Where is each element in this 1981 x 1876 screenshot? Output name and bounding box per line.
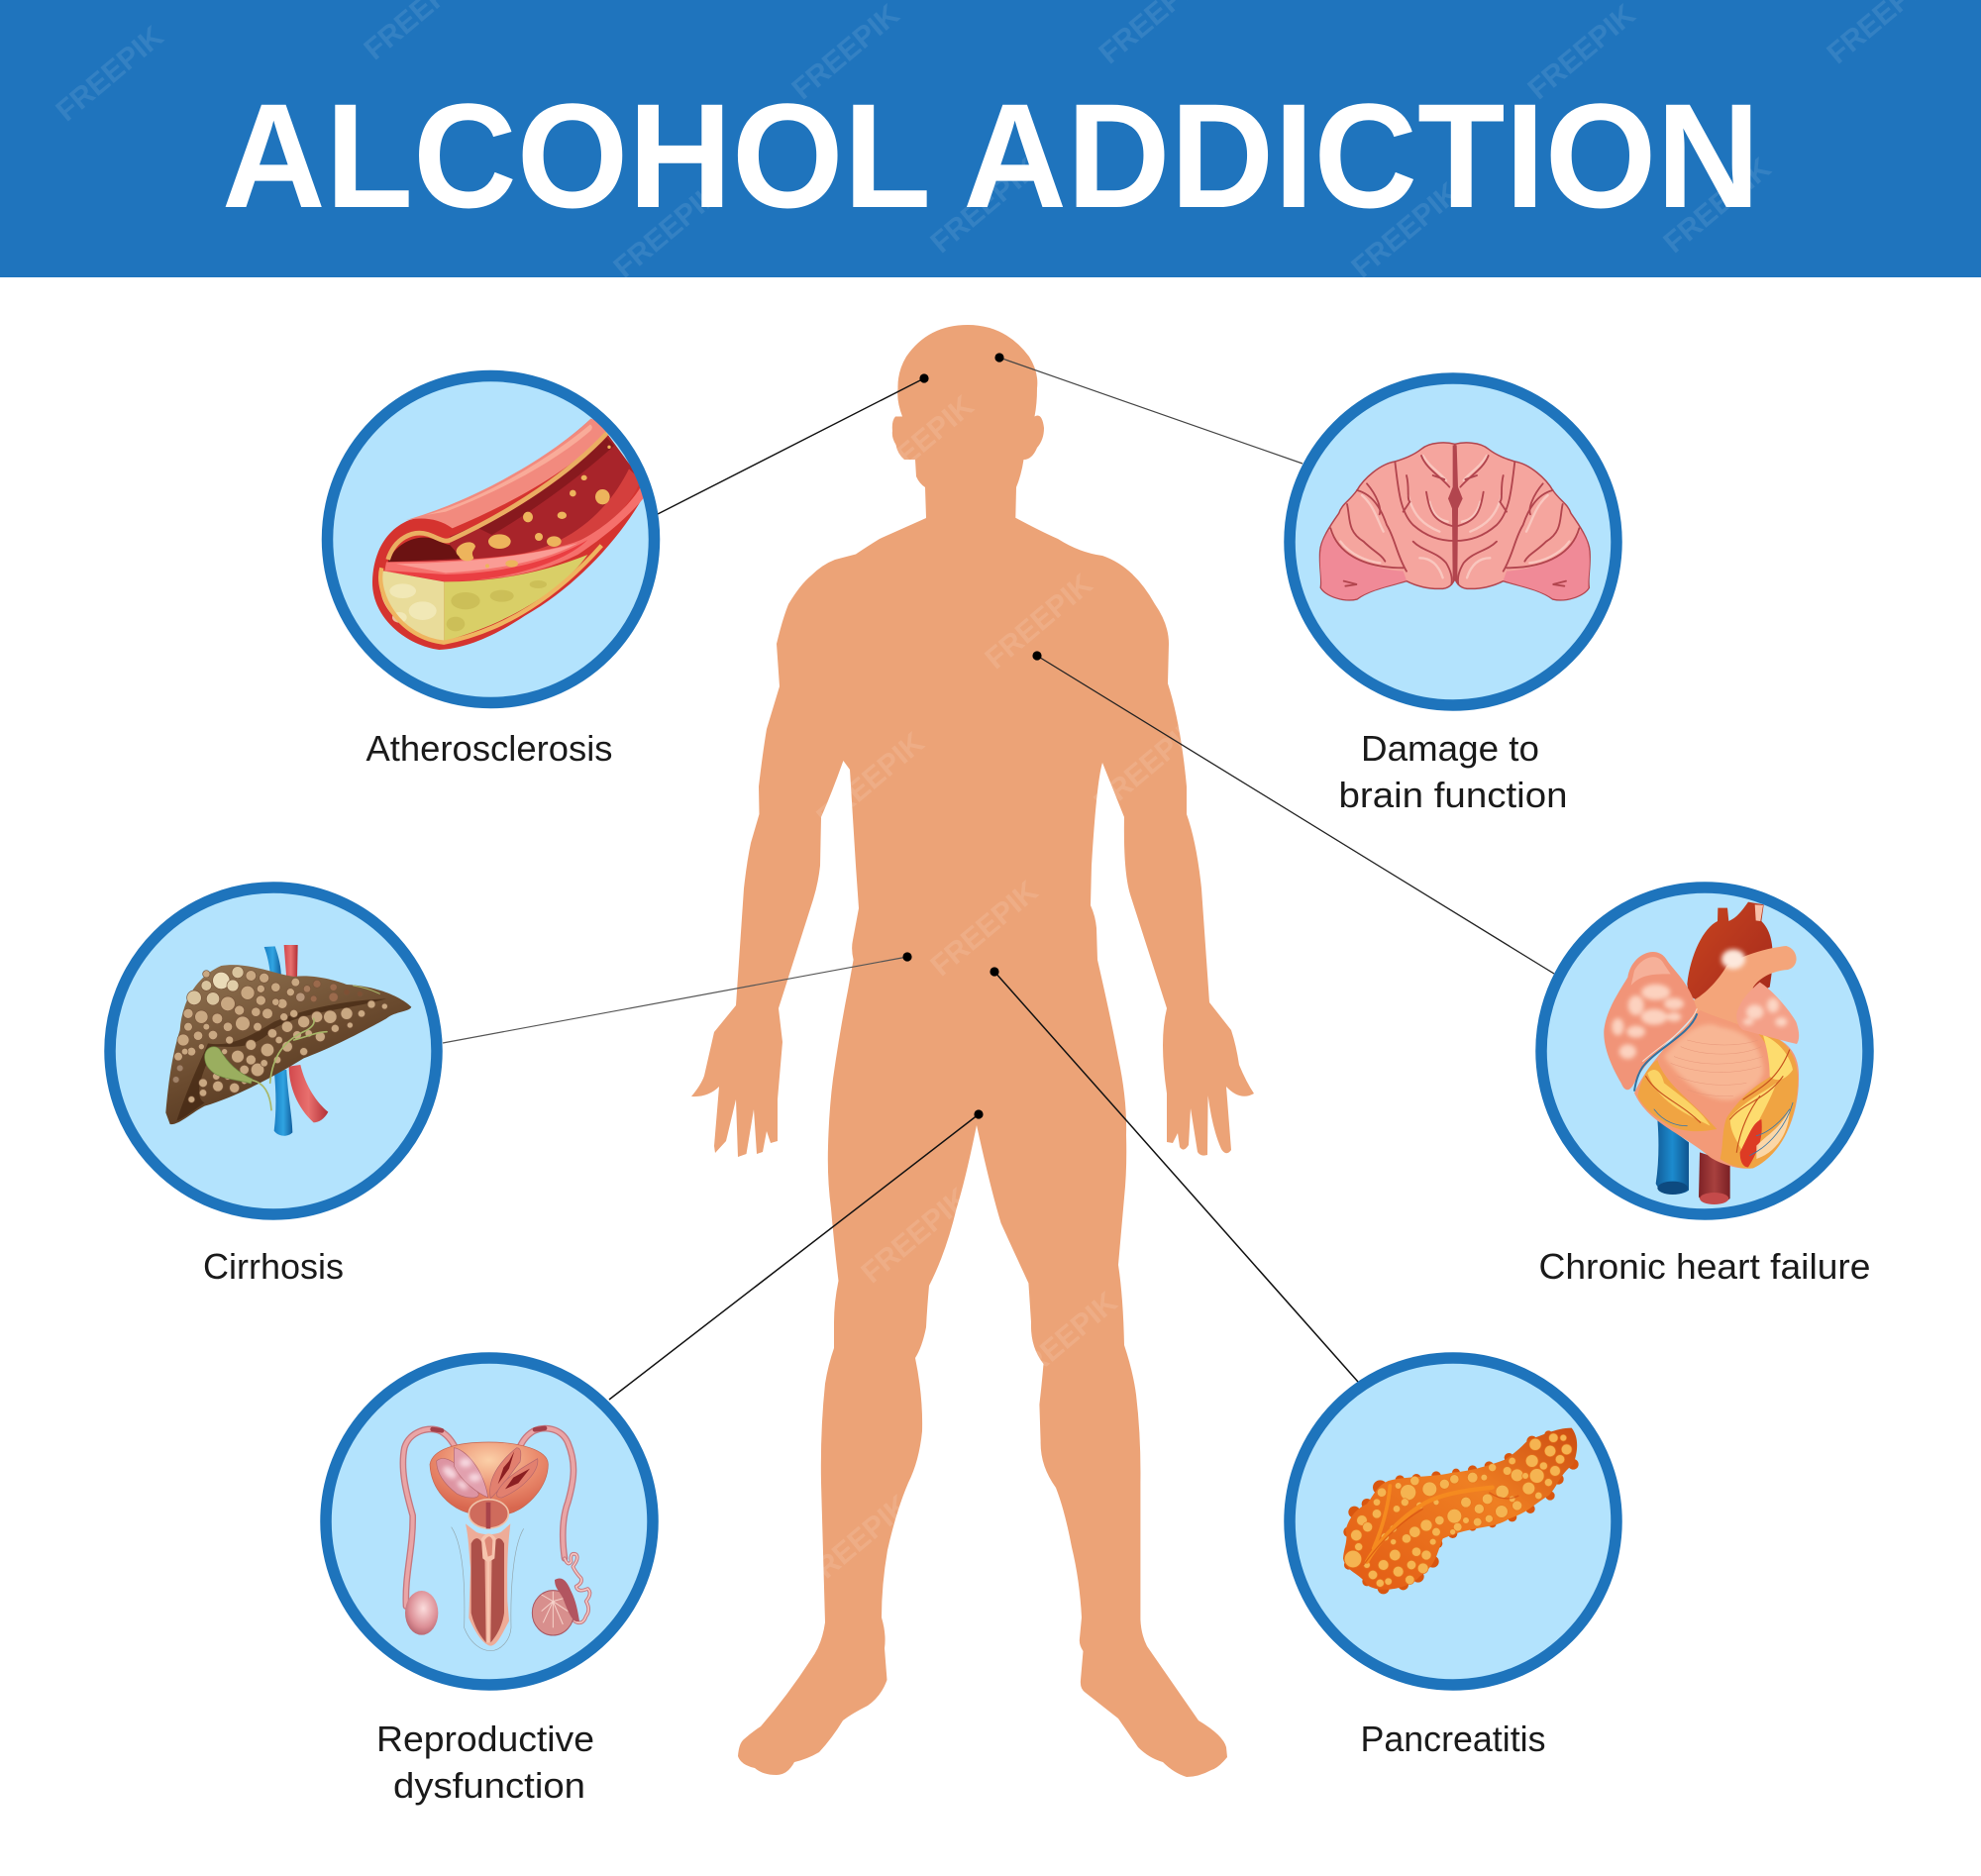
panel: chronic heart failure: [1541, 887, 1868, 1214]
coronary fat: [1720, 1033, 1798, 1169]
testicle left: [405, 1591, 438, 1635]
icon: artery with plaque: [372, 419, 647, 650]
label: cirrhosis: Cirrhosis: [203, 1246, 344, 1287]
body watermarks: [795, 389, 1208, 1597]
icon: brain: [1319, 357, 1590, 600]
line: groin to reproductive organs: [609, 1109, 984, 1400]
bladder: [430, 1442, 548, 1513]
title banner: FREEPIK: [50, 20, 170, 128]
title banner: FREEPIK: [785, 0, 906, 106]
title banner: FREEPIK: [1657, 152, 1778, 260]
line: abdomen to liver: [443, 952, 912, 1043]
icon: heart: [1604, 902, 1799, 1204]
label: chronic heart failure: Chronic heart failure: [1539, 1246, 1870, 1287]
line: abdomen to pancreas: [990, 967, 1358, 1382]
body watermarks: FREEPIK: [855, 1182, 976, 1290]
panel: pancreatitis: [1290, 1358, 1616, 1685]
line: head to atherosclerosis: [658, 373, 929, 514]
panel: atherosclerosis: [327, 376, 654, 703]
body watermarks: FREEPIK: [1003, 1286, 1124, 1394]
title banner: FREEPIK: [607, 176, 728, 284]
icon: cirrhotic liver: [165, 945, 411, 1136]
body watermarks: FREEPIK: [924, 875, 1045, 983]
line: chest to heart: [1032, 651, 1554, 974]
testicle right cross-section: [532, 1591, 573, 1635]
icon: male reproductive system: [403, 1428, 589, 1651]
body watermarks: FREEPIK: [979, 568, 1099, 676]
left atrium: [1604, 952, 1697, 1090]
body watermarks: FREEPIK: [1088, 711, 1208, 819]
label: reproductive dysfunction: dysfunction: [393, 1765, 585, 1806]
label: atherosclerosis: Atherosclerosis: [366, 728, 612, 769]
liver nodules: [172, 967, 387, 1102]
connector lines and dots: [443, 353, 1554, 1400]
panel: cirrhosis: [110, 887, 437, 1214]
human body silhouette: [691, 325, 1254, 1777]
plaque deposits: [457, 446, 611, 568]
title: ALCOHOL ADDICTION: [222, 72, 1760, 239]
body watermarks: FREEPIK: [795, 1489, 916, 1597]
label: damage to brain function: Damage to: [1361, 728, 1539, 769]
label: damage to brain function: [1339, 728, 1567, 815]
line: head to brain: [994, 353, 1303, 464]
title banner: FREEPIK: [1345, 176, 1466, 284]
right atrium: [1736, 983, 1799, 1044]
title banner: [0, 0, 1981, 284]
penis cross-section: [452, 1527, 524, 1651]
label: reproductive dysfunction: Reproductive: [376, 1719, 594, 1759]
seminal vesicles: [437, 1448, 538, 1499]
label: pancreatitis: Pancreatitis: [1361, 1719, 1545, 1759]
panel: reproductive dysfunction: [326, 1358, 653, 1685]
body watermarks: FREEPIK: [810, 726, 931, 834]
title banner: FREEPIK: [924, 152, 1045, 260]
icon: pancreas: [1343, 1428, 1579, 1594]
body watermarks: FREEPIK: [860, 389, 981, 497]
label: reproductive dysfunction: [376, 1719, 594, 1806]
title banner: FREEPIK: [1521, 0, 1642, 106]
panel: damage to brain function: [1290, 357, 1616, 705]
prostate: [469, 1500, 508, 1528]
label: damage to brain function: brain function: [1339, 775, 1567, 815]
